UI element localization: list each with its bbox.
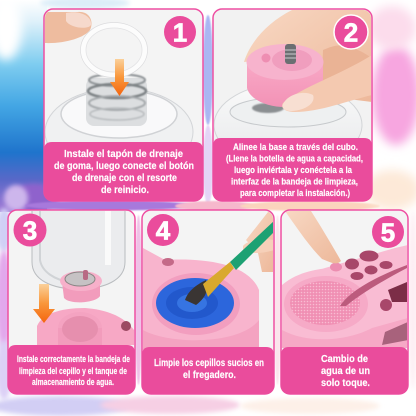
caption band bbox=[213, 138, 372, 201]
caption band: Alinee la base a través del cubo. bbox=[233, 142, 358, 153]
badge 3 bbox=[14, 214, 46, 246]
caption band bbox=[281, 347, 408, 394]
badge 4: 4 bbox=[156, 216, 171, 246]
caption band: Instale correctamente la bandeja de bbox=[17, 354, 130, 364]
caption band: interfaz de la bandeja de limpieza, bbox=[231, 176, 358, 186]
pink base bbox=[246, 44, 324, 107]
pink tray bbox=[282, 245, 408, 348]
finger bbox=[285, 211, 341, 263]
thumb bbox=[282, 55, 372, 112]
brush bbox=[185, 221, 274, 305]
hand bbox=[244, 10, 372, 102]
blue disc bbox=[156, 278, 234, 328]
caption band: solo toque. bbox=[321, 378, 370, 389]
caption band: el fregadero. bbox=[183, 370, 236, 381]
panel 5: one-touch water change bbox=[281, 210, 408, 394]
pink tray bbox=[37, 308, 134, 345]
badge 5: 5 bbox=[381, 218, 395, 248]
caption band bbox=[8, 345, 135, 394]
bottle bbox=[214, 90, 362, 138]
caption band: luego inviértala y conéctela a la bbox=[234, 165, 353, 175]
finger bbox=[44, 12, 92, 43]
caption band bbox=[44, 142, 203, 201]
panel 4: clean brushes bbox=[142, 210, 274, 394]
caption band: limpieza del cepillo y el tanque de bbox=[19, 366, 127, 376]
bottle with threaded neck bbox=[45, 73, 194, 143]
caption band bbox=[142, 347, 274, 394]
caption band: de drenaje con el resorte bbox=[72, 173, 177, 184]
caption band: Instale el tapón de drenaje bbox=[64, 149, 183, 160]
caption band: Cambio de bbox=[321, 354, 368, 365]
arrow bbox=[110, 59, 129, 96]
panel 1: drain plug bbox=[44, 9, 203, 201]
caption band: agua de un bbox=[321, 366, 370, 377]
hand bbox=[246, 212, 274, 272]
rubber ring bbox=[97, 72, 132, 77]
caption band: (Llene la botella de agua a capacidad, bbox=[226, 154, 363, 164]
panel 3: tank and tray bbox=[8, 208, 135, 394]
badge 1: 1 bbox=[173, 18, 187, 48]
caption band: para completar la instalación.) bbox=[240, 188, 350, 198]
caption band: Limpie los cepillos sucios en bbox=[154, 358, 264, 369]
bottle base cap bbox=[60, 270, 102, 302]
caption band: de goma, luego conecte el botón bbox=[54, 161, 194, 172]
panel 2: align base bbox=[213, 9, 372, 201]
caption band: de reinicio. bbox=[101, 185, 149, 196]
badge 3: 3 bbox=[23, 216, 37, 246]
caption band: almacenamiento de agua. bbox=[32, 377, 114, 387]
arrow bbox=[33, 284, 55, 323]
water bottle bbox=[32, 208, 125, 289]
pink tray bbox=[143, 248, 259, 350]
badge 5 bbox=[372, 216, 404, 248]
badge 1 bbox=[164, 16, 196, 48]
badge 2: 2 bbox=[344, 18, 358, 48]
badge 2 bbox=[334, 15, 368, 49]
badge 4 bbox=[147, 214, 179, 246]
